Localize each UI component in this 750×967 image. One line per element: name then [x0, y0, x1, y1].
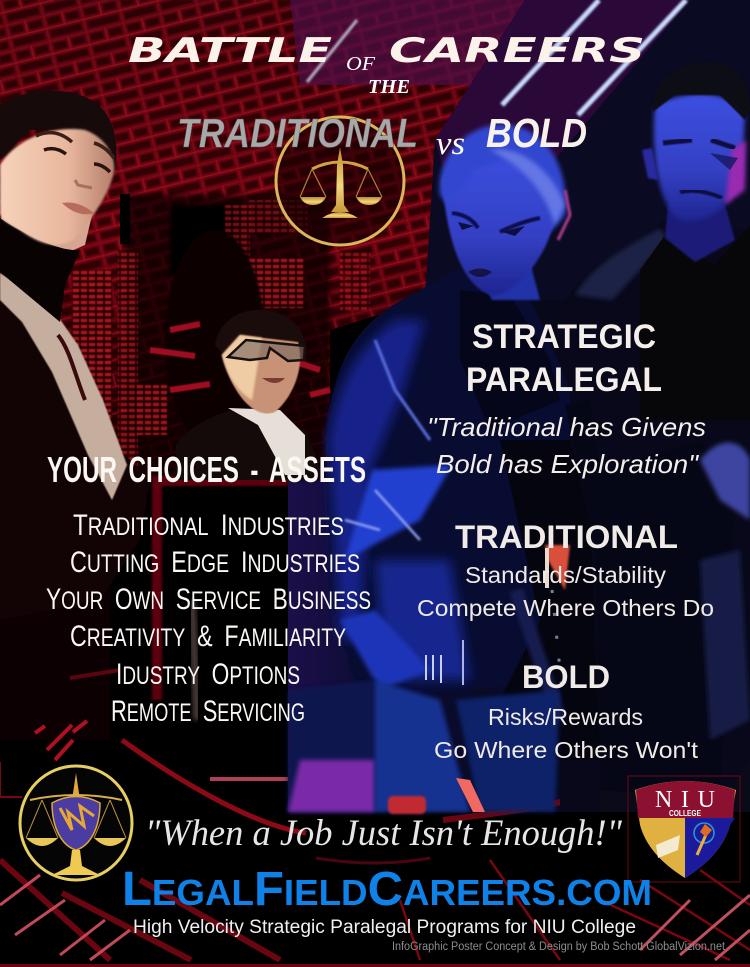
heading: traditional vs bold: BOLD	[486, 110, 587, 156]
jacket	[325, 270, 570, 700]
heading: traditional vs bold: TRADITIONAL	[177, 110, 418, 156]
logo: NIU College shield	[628, 776, 740, 882]
lower left door frame	[0, 480, 288, 779]
hair	[653, 62, 750, 120]
shirt	[0, 273, 127, 500]
your choices list: IDUSTRY OPTIONS	[116, 658, 300, 691]
title: THE	[368, 76, 410, 98]
your choices list: TRADITIONAL INDUSTRIES	[73, 509, 344, 542]
your choices list: YOUR CHOICES - ASSETS	[47, 449, 366, 490]
collar	[0, 218, 80, 322]
features	[452, 213, 540, 232]
brows eyes	[36, 133, 114, 158]
logo: golden scales and cup	[20, 766, 132, 880]
neck	[665, 205, 735, 262]
traditional text block: Standards/Stability	[465, 562, 667, 588]
neck	[0, 200, 92, 255]
programs line: High Velocity Strategic Paralegal Programs for NIU College	[133, 917, 636, 938]
traditional text block	[417, 519, 714, 621]
person: right woman	[288, 125, 750, 814]
legs	[288, 680, 430, 812]
scales emblem	[276, 117, 404, 245]
hair	[215, 310, 306, 360]
traditional text block: Compete Where Others Do	[417, 595, 714, 621]
title: OF	[346, 53, 376, 75]
heading: traditional vs bold: vs	[436, 126, 465, 162]
hair	[440, 125, 566, 230]
bold text block: Risks/Rewards	[488, 704, 643, 730]
face	[442, 148, 558, 295]
person: right man	[560, 62, 750, 810]
strategic paralegal text block: PARALEGAL	[466, 361, 662, 399]
bold text block: BOLD	[522, 659, 610, 695]
neon stripes	[307, 0, 686, 115]
glasses	[228, 340, 305, 361]
strategic paralegal text block: "Traditional has Givens	[427, 412, 706, 442]
your choices list	[46, 449, 371, 728]
your choices list: REMOTE SERVICING	[111, 695, 305, 728]
traditional text block: TRADITIONAL	[455, 519, 678, 555]
hair	[0, 91, 116, 175]
features	[663, 140, 735, 148]
title	[128, 31, 645, 98]
neck	[470, 255, 540, 300]
bold text block	[434, 659, 699, 763]
your choices list: CREATIVITY & FAMILIARITY	[70, 620, 346, 653]
jacket	[176, 410, 318, 480]
person: left woman	[0, 91, 150, 620]
your choices list: YOUR OWN SERVICE BUSINESS	[46, 583, 371, 616]
strategic paralegal text block: STRATEGIC	[472, 318, 656, 356]
title: CAREERS	[389, 31, 645, 71]
person: middle woman	[176, 310, 318, 480]
jacket	[0, 290, 150, 620]
logo: NIU College shield: NIU	[655, 787, 715, 813]
city silhouette	[72, 194, 370, 480]
jacket	[560, 220, 750, 810]
bottom arcs	[0, 740, 750, 967]
bold text block: Go Where Others Won't	[434, 737, 699, 763]
design credit: InfoGraphic Poster Concept & Design by Bob Schott GlobalVizion.net	[392, 941, 726, 953]
face	[654, 94, 745, 221]
tagline quote: "When a Job Just Isn't Enough!"	[145, 813, 622, 854]
logo: NIU College shield: COLLEGE	[669, 809, 702, 818]
your choices list: CUTTING EDGE INDUSTRIES	[70, 546, 360, 579]
heading: battle careers: BATTLE	[128, 31, 332, 71]
face	[222, 335, 300, 413]
sections below the waist	[470, 440, 600, 760]
heading: traditional vs bold	[177, 110, 587, 162]
website url: LEGALFIELDCAREERS.COM	[122, 863, 652, 916]
strategic paralegal text block: Bold has Exploration"	[436, 449, 700, 479]
strategic paralegal text block	[427, 318, 706, 479]
face	[0, 129, 114, 245]
